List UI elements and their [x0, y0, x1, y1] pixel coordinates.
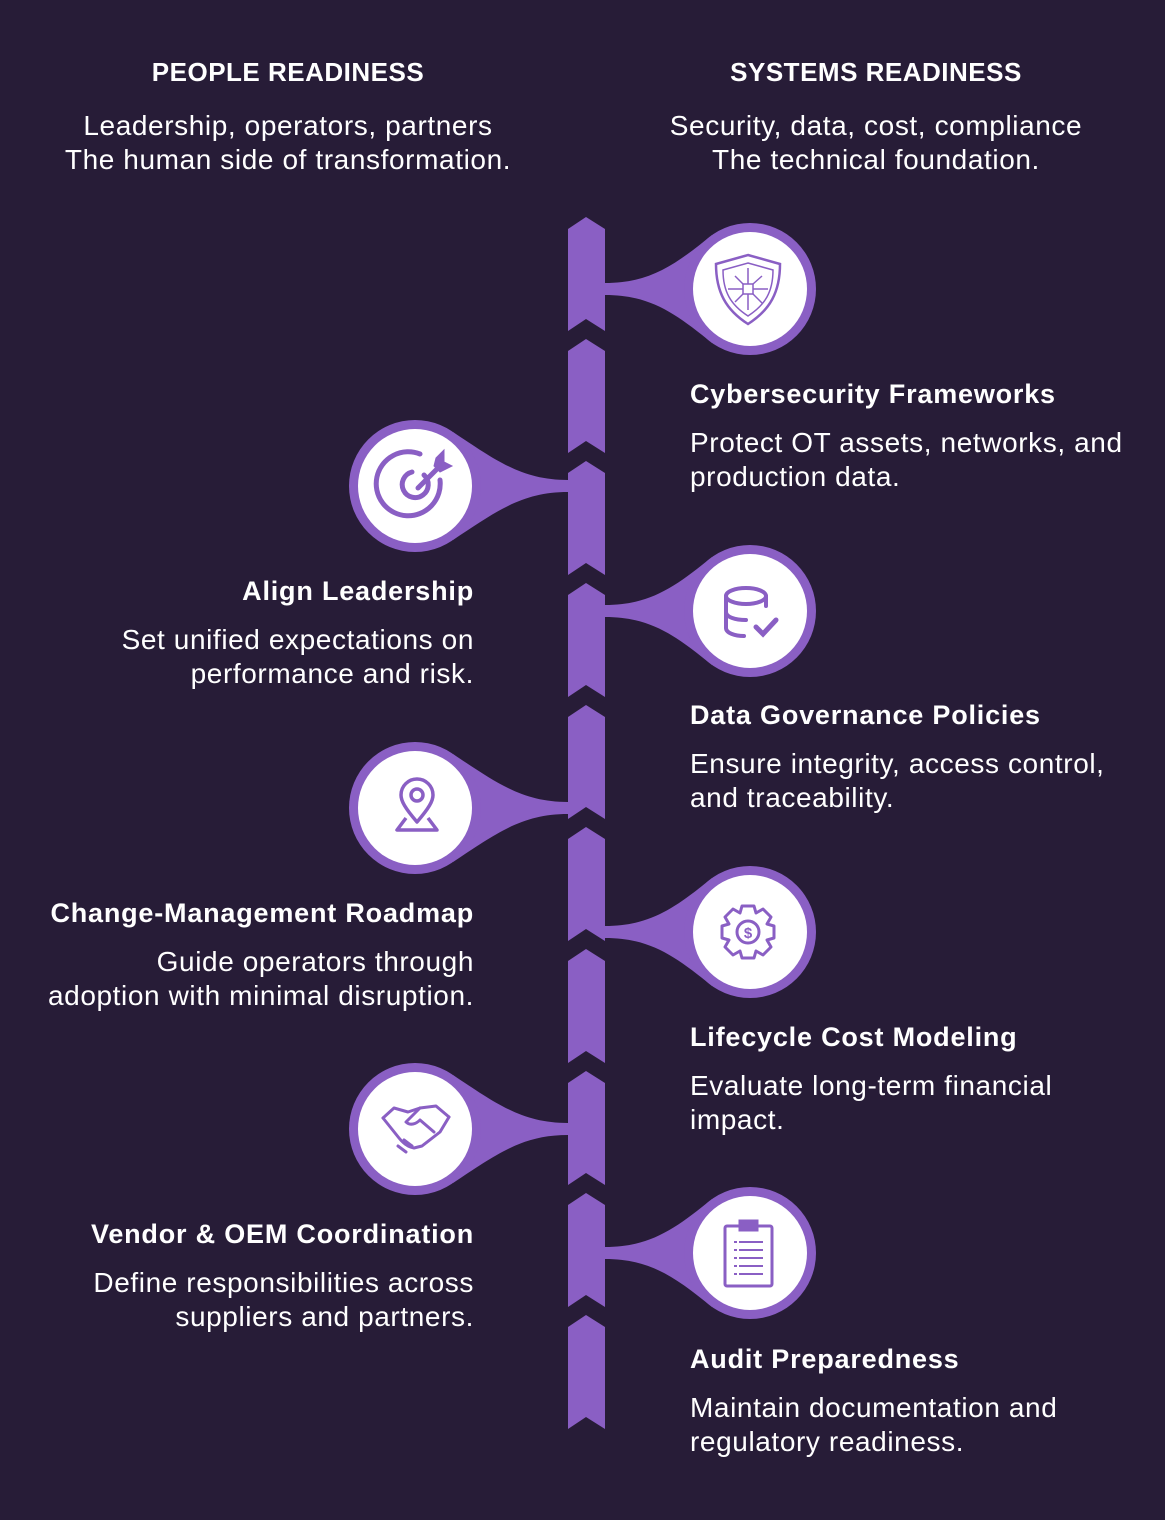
text: audit preparedness — [690, 1344, 1057, 1457]
text: vendor & oem coordination: Define responsibilities across — [93, 1267, 474, 1298]
text: change-management roadmap: adoption with minimal disruption. — [48, 980, 474, 1011]
heading: systems readiness: SYSTEMS READINESS — [730, 57, 1022, 87]
node: audit preparedness — [605, 1187, 816, 1319]
icon: map pin — [397, 779, 437, 830]
text: change-management roadmap — [48, 898, 474, 1011]
text: align leadership: Set unified expectations on — [122, 624, 474, 655]
text: audit preparedness: regulatory readiness. — [690, 1426, 964, 1457]
text: change-management roadmap: Guide operators through — [157, 946, 474, 977]
heading: systems readiness — [670, 57, 1082, 175]
icon: shield circuit — [716, 255, 780, 324]
icon: gear dollar — [722, 906, 774, 958]
heading: systems readiness: The technical foundation. — [712, 144, 1040, 175]
text: lifecycle cost modeling: impact. — [690, 1104, 784, 1135]
text: align leadership: Align Leadership — [242, 576, 474, 606]
node: align leadership — [349, 420, 568, 552]
node: vendor & oem coordination — [349, 1063, 568, 1195]
heading: people readiness: The human side of transformation. — [65, 144, 511, 175]
text: lifecycle cost modeling: Evaluate long-term financial — [690, 1070, 1052, 1101]
icon: handshake — [383, 1106, 449, 1152]
text: vendor & oem coordination: Vendor & OEM Coordination — [91, 1219, 474, 1249]
text: data governance: Data Governance Policies — [690, 700, 1041, 730]
icon: clipboard — [725, 1221, 772, 1286]
text: data governance — [690, 700, 1105, 813]
text: cybersecurity frameworks: Cybersecurity Frameworks — [690, 379, 1056, 409]
text: lifecycle cost modeling: Lifecycle Cost Modeling — [690, 1022, 1017, 1052]
heading: people readiness — [65, 57, 511, 175]
text: vendor & oem coordination: suppliers and partners. — [175, 1301, 474, 1332]
spine: chevron timeline — [568, 217, 605, 1429]
icon: target — [376, 450, 452, 516]
text: cybersecurity frameworks: production data. — [690, 461, 900, 492]
text: align leadership — [122, 576, 474, 689]
heading: systems readiness: Security, data, cost, compliance — [670, 110, 1082, 141]
node: data governance — [605, 545, 816, 677]
node: lifecycle cost modeling — [605, 866, 816, 998]
text: data governance: and traceability. — [690, 782, 894, 813]
text: vendor & oem coordination — [91, 1219, 474, 1332]
text: cybersecurity frameworks — [690, 379, 1123, 492]
text: audit preparedness: Audit Preparedness — [690, 1344, 959, 1374]
node: cybersecurity frameworks — [605, 223, 816, 355]
icon: database check — [726, 588, 776, 636]
text: data governance: Ensure integrity, access control, — [690, 748, 1105, 779]
text: cybersecurity frameworks: Protect OT assets, networks, and — [690, 427, 1123, 458]
icon: gear dollar: $ — [744, 925, 753, 942]
node: change-management roadmap — [349, 742, 568, 874]
heading: people readiness: Leadership, operators, partners — [83, 110, 493, 141]
text: audit preparedness: Maintain documentation and — [690, 1392, 1057, 1423]
text: change-management roadmap: Change-Management Roadmap — [50, 898, 474, 928]
text: lifecycle cost modeling — [690, 1022, 1052, 1135]
text: align leadership: performance and risk. — [191, 658, 474, 689]
heading: people readiness: PEOPLE READINESS — [152, 57, 424, 87]
